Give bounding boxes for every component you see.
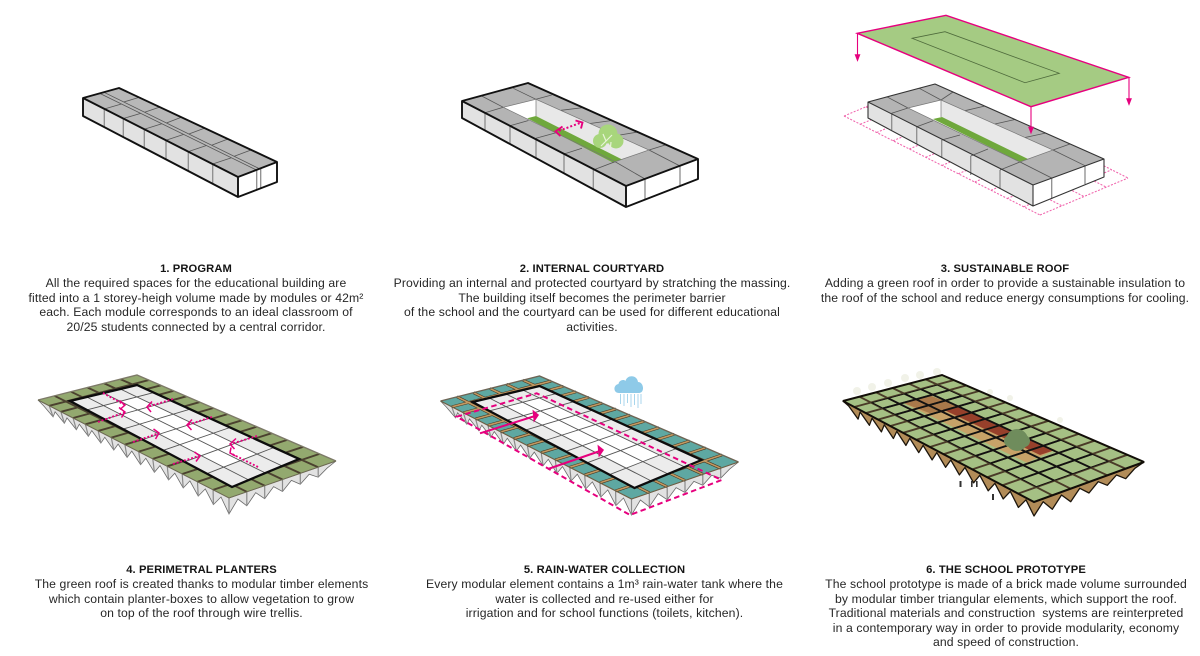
text: perimetral planters: 4. PERIMETRAL PLANTERS	[126, 564, 277, 576]
text: program: All the required spaces for the educational building are	[46, 276, 346, 290]
text: rain-water collection: Every modular element contains a 1m³ rain-water tank where the	[426, 577, 783, 591]
inner floor grid	[70, 385, 299, 487]
text: rain-water collection: water is collected and re-used either for	[495, 592, 714, 606]
text: sustainable roof: Adding a green roof in order to provide a sustainable insulation to	[825, 276, 1185, 290]
text: the school prototype: 6. THE SCHOOL PROTOTYPE	[926, 564, 1086, 576]
diagram: roof with planters	[38, 375, 336, 514]
roof surface	[843, 375, 1144, 502]
arrows: roof lowering	[855, 33, 1132, 134]
text: program: 20/25 students connected by a central corridor.	[66, 320, 326, 334]
text: perimetral planters: on top of the roof through wire trellis.	[100, 606, 303, 620]
text: sustainable roof	[821, 263, 1189, 305]
people	[960, 481, 994, 500]
text: perimetral planters	[35, 564, 368, 620]
text: internal courtyard: of the school and the courtyard can be used for different educational	[404, 305, 780, 319]
panel: 5 rain-water collection	[426, 375, 783, 620]
roof outline	[843, 375, 1144, 502]
icon: tree	[593, 124, 624, 152]
panel: 3 sustainable roof	[821, 14, 1189, 305]
text: internal courtyard: activities.	[566, 320, 618, 334]
text: program: each. Each module corresponds to an ideal classroom of	[39, 305, 353, 319]
text: the school prototype	[825, 564, 1187, 649]
text: rain-water collection	[426, 564, 783, 620]
plants: faint trellis vegetation	[853, 368, 1063, 423]
arrows: water flow	[480, 410, 604, 469]
text: perimetral planters: The green roof is created thanks to modular timber elements	[35, 577, 368, 591]
tank ring	[440, 376, 738, 499]
diagram: pink site grid	[844, 106, 1128, 216]
text: the school prototype: The school prototype is made of a brick made volume surrounded	[825, 577, 1187, 591]
diagram: roof with water tanks	[440, 376, 738, 515]
roof grid	[854, 379, 1127, 495]
panel: 1 program	[28, 87, 364, 334]
courtyard	[904, 396, 1055, 463]
arrows: dotted pink	[98, 393, 258, 467]
text: the school prototype: and speed of construction.	[933, 635, 1079, 649]
panel: 6 the school prototype	[825, 368, 1187, 649]
text: internal courtyard	[394, 263, 790, 334]
text: internal courtyard: 2. INTERNAL COURTYARD	[520, 263, 664, 275]
text: rain-water collection: irrigation and for school functions (toilets, kitchen).	[466, 606, 743, 620]
inner floor grid	[472, 386, 702, 488]
panel: 4 perimetral planters	[35, 374, 368, 620]
diagram: school roof	[843, 368, 1144, 516]
text: the school prototype: by modular timber triangular elements, which support the roof.	[835, 592, 1177, 606]
catchment outline: dashed pink	[457, 393, 722, 515]
text: program: 1. PROGRAM	[160, 263, 232, 275]
text: the school prototype: Traditional materials and construction systems are reinterpreted	[829, 606, 1183, 620]
diagram: courtyard massing	[462, 83, 698, 207]
text: perimetral planters: which contain planter-boxes to allow vegetation to grow	[49, 592, 354, 606]
diagram: program volume	[83, 88, 277, 197]
text: program	[28, 263, 364, 334]
text: rain-water collection: 5. RAIN-WATER COLLECTION	[524, 564, 685, 576]
diagram: building with courtyard	[868, 84, 1104, 206]
spikes: timber triangles	[38, 400, 336, 514]
spikes: timber triangles	[440, 401, 738, 515]
planter ring	[38, 375, 336, 498]
spikes: timber triangles	[843, 401, 1144, 516]
icon: tree	[1004, 429, 1030, 451]
icon: rain cloud	[614, 376, 643, 408]
arrow: courtyard width	[556, 120, 582, 136]
text: sustainable roof: the roof of the school and reduce energy consumptions for cooling.	[821, 291, 1189, 305]
panel: 2 internal courtyard	[394, 82, 790, 334]
text: internal courtyard: Providing an internal and protected courtyard by stratching the massing.	[394, 276, 790, 290]
text: sustainable roof: 3. SUSTAINABLE ROOF	[941, 263, 1069, 275]
diagram: green roof slab	[857, 15, 1129, 107]
text: internal courtyard: The building itself becomes the perimeter barrier	[458, 291, 726, 305]
text: the school prototype: in a contemporary way in order to provide modularity, economy	[833, 621, 1179, 635]
text: program: fitted into a 1 storey-heigh volume made by modules or 42m²	[29, 291, 363, 305]
